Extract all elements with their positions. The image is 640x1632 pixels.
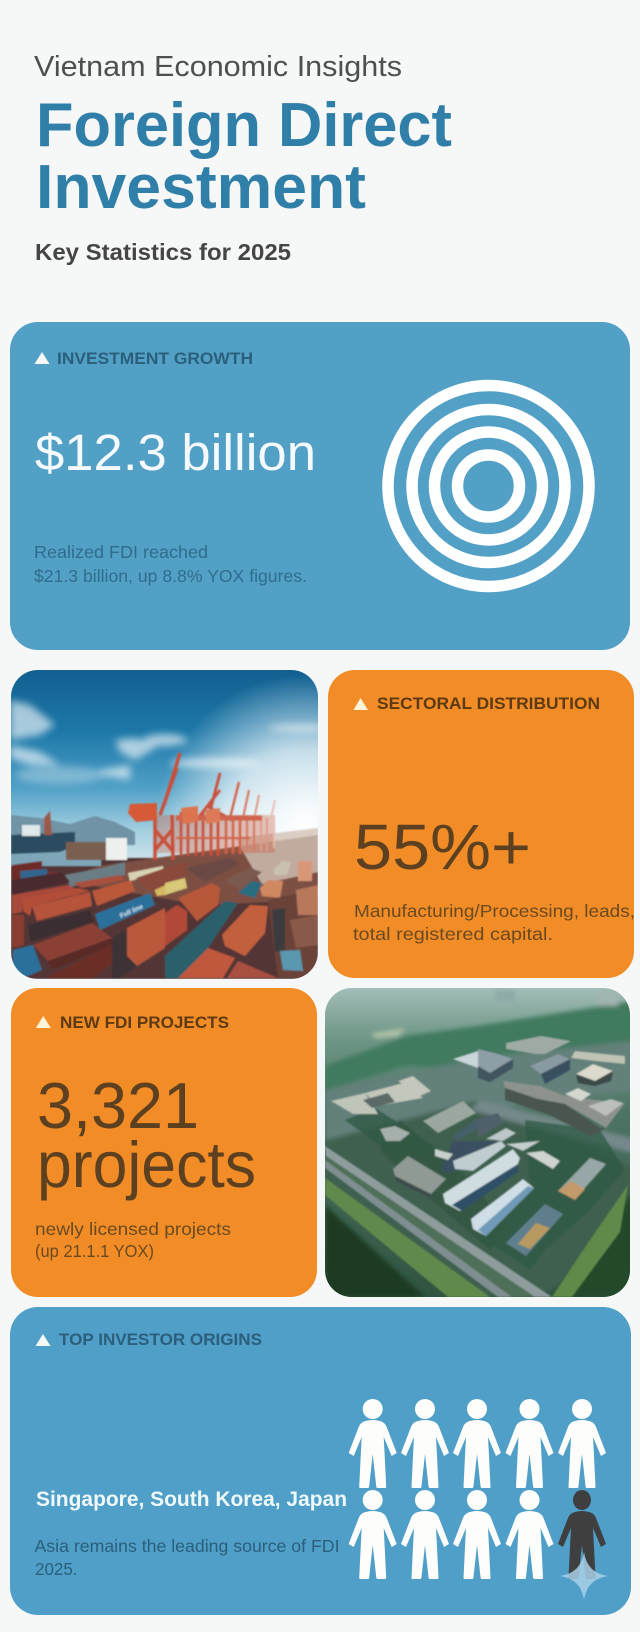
panel: investment growth [10, 322, 630, 650]
hills, water and ship [11, 815, 135, 845]
label: investment growth: INVESTMENT GROWTH [57, 350, 253, 368]
description [35, 1219, 231, 1261]
description: $21.3 billion, up 8.8% YOX figures. [34, 566, 307, 586]
containers right [136, 862, 186, 892]
description: Manufacturing/Processing, leads, [354, 901, 635, 921]
central-right buildings [478, 1049, 513, 1073]
panel: new FDI projects [11, 988, 317, 1297]
icon: triangle [36, 1334, 50, 1346]
description: newly licensed projects [35, 1219, 231, 1239]
description [34, 1536, 340, 1579]
stat: 55%+: 55%+ [354, 811, 531, 883]
pictogram: ten people, one highlighted [349, 1399, 606, 1579]
vegetation, far fields and towers [325, 990, 640, 1297]
title: Investment [36, 153, 366, 222]
clouds [10, 700, 332, 784]
description [34, 542, 307, 586]
description: (up 21.1.1 YOX) [35, 1241, 154, 1261]
subtitle: Key Statistics for 2025 [35, 239, 291, 265]
header [34, 51, 452, 265]
dock and far yard [88, 834, 318, 905]
title [36, 91, 452, 222]
containers left [12, 861, 42, 880]
eyebrow: Vietnam Economic Insights: Vietnam Economic Insights [34, 51, 402, 83]
stat: 3,321 projects [37, 1069, 256, 1201]
description: total registered capital. [353, 924, 553, 944]
panel: sectoral distribution [328, 670, 635, 978]
icon: triangle [36, 1016, 51, 1028]
long white buildings [440, 1141, 503, 1172]
icon: sparkle [560, 1552, 608, 1600]
description: Realized FDI reached [34, 542, 208, 562]
stat: 3,321 projects: projects [37, 1128, 256, 1201]
cranes [155, 815, 275, 853]
label: top investor origins: TOP INVESTOR ORIGINS [59, 1331, 262, 1349]
courtyard building [506, 1204, 563, 1256]
right-hand blocks [558, 1157, 606, 1191]
description: Asia remains the leading source of FDI [34, 1536, 340, 1556]
icon: triangle [354, 698, 368, 710]
container lettering: Full line [119, 903, 145, 920]
road [325, 1146, 552, 1297]
stat: $12.3 billion: $12.3 billion [35, 424, 316, 481]
photo: container port with cranes [10, 670, 332, 979]
description: 2025. [35, 1559, 78, 1579]
icon: triangle [34, 352, 50, 364]
label: sectoral distribution: SECTORAL DISTRIBUTION [377, 695, 600, 713]
stat: 3,321 projects: 3,321 [37, 1069, 199, 1142]
panel: top investor origins [10, 1307, 631, 1615]
description [353, 901, 635, 944]
label: new FDI projects: NEW FDI PROJECTS [60, 1014, 229, 1032]
photo: aerial industrial park [325, 988, 640, 1297]
tree rows [381, 1120, 492, 1249]
title: Foreign Direct [36, 91, 452, 160]
far-left lots [331, 1093, 378, 1114]
countries: Singapore, South Korea, Japan [36, 1488, 347, 1511]
icon: concentric rings [388, 386, 589, 586]
